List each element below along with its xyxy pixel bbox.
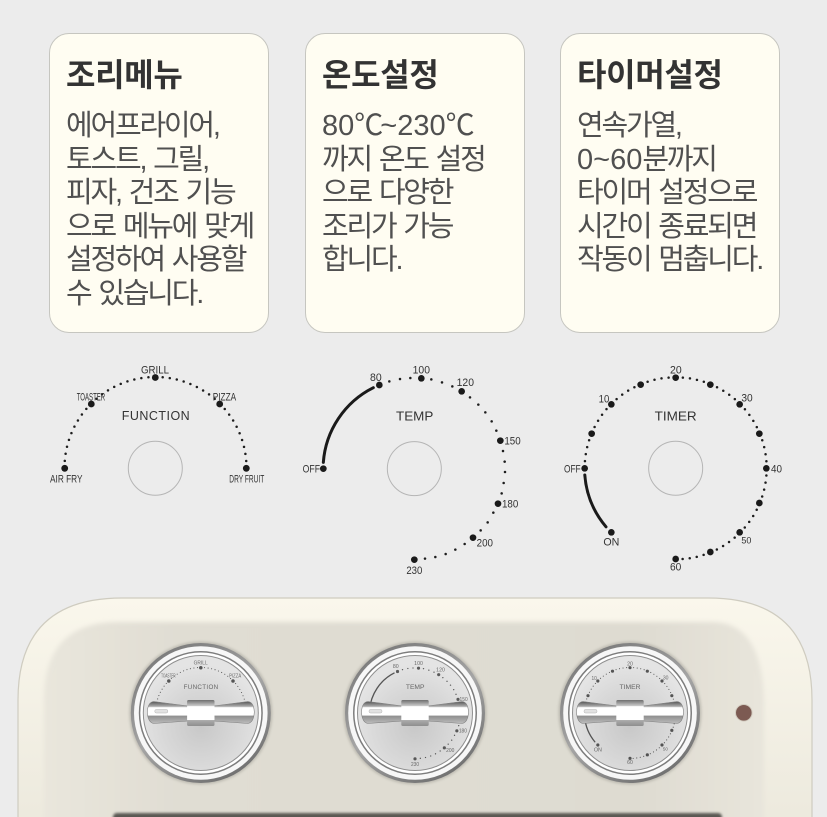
heading: timer setting: 타이머설정 [577,57,723,93]
dial labels: timer: OFF [564,463,581,475]
dial labels: timer [564,365,782,574]
knob dial print: temp: 100 [414,661,423,667]
active arc: timer [585,475,606,527]
dial centre circle: temp [387,442,441,496]
dial labels: timer: 40 [771,463,782,475]
knob dial print: function: GRILL [194,660,208,666]
dial dots: temp [388,377,506,560]
text block: temperature description [322,110,485,276]
dial labels: temp: 120 [457,377,474,389]
dial centre circle: function [128,441,182,495]
dial dots: timer [585,377,767,559]
active arc: temp [323,388,373,462]
knob handle [362,700,468,726]
knob dial print: timer: 50 [663,747,668,752]
text block: timer description: 작동이 멈춥니다. [577,244,762,276]
dial labels: temp: 100 [413,365,430,377]
knob dial print: timer: ON [594,748,602,754]
knob dial print: timer: 10 [591,676,597,682]
knob handle [576,700,684,726]
text block: cooking menu description: 설정하여 사용할 [66,244,245,276]
text block: temperature description: 합니다. [322,244,401,276]
text block: timer description: 0~60분까지 [577,144,716,176]
dial centre circle: timer [649,441,703,495]
text block: temperature description: 조리가 가능 [322,211,452,243]
oven control panel [44,622,764,817]
knob dial print: function: FUNCTION [184,684,218,691]
knob dial print: timer: 20 [627,662,633,668]
dial labels: temp: 200 [477,537,493,549]
dial stops: function [61,374,250,472]
knob dial print: temp: TEMP [406,684,425,691]
dial labels: timer: 20 [670,365,682,377]
dial labels: temp: 230 [406,565,422,577]
knob dial print: timer: 60 [627,760,633,766]
text block: timer description: 시간이 종료되면 [577,211,756,243]
oven window top edge [113,813,722,817]
knob: function [129,642,272,784]
oven body [18,598,812,817]
heading: cooking menu: 조리메뉴 [66,57,183,93]
dial labels: temp [303,365,521,577]
dial diagram: function [50,364,264,495]
dial labels: temp: OFF [303,464,320,476]
dial labels: timer: TIMER [655,408,697,423]
text block: timer description: 연속가열, [577,110,681,142]
text block: cooking menu description: 토스트, 그릴, [66,144,208,176]
knob dial print: temp: 200 [446,748,454,754]
dial labels: function: TOASTER [77,392,105,404]
dial labels: timer: 60 [670,562,681,574]
dial labels: function: PIZZA [213,392,237,404]
text block: temperature description: 으로 다양한 [322,177,452,209]
panel: timer setting [560,33,780,333]
dial diagram: temp [303,365,521,577]
knob: timer [558,642,702,784]
text block: temperature description: 까지 온도 설정 [322,144,485,176]
dial labels: timer: 50 [741,535,751,545]
dial labels: function: FUNCTION [122,409,190,423]
dial stops: temp [320,375,504,563]
text block: cooking menu description: 에어프라이어, [66,110,219,142]
text block: timer description [577,110,762,276]
dial labels: temp: TEMP [396,408,433,423]
dial labels: temp: 80 [370,372,382,384]
knob dial print: temp [370,661,468,768]
dial labels: function: GRILL [141,364,169,376]
knob dial print: temp: 180 [459,729,467,735]
knob dial print: temp: 150 [460,697,468,703]
knob dial print: timer: TIMER [619,684,641,691]
heading: temperature setting: 온도설정 [322,57,439,93]
dial labels: timer: 30 [741,392,753,404]
knob dial print: temp: 230 [411,762,419,768]
dial labels: timer: ON [603,536,619,548]
text block: cooking menu description [66,110,253,310]
dial labels: function [50,364,264,486]
panel: temperature setting [305,33,525,333]
text block: cooking menu description: 피자, 건조 기능 [66,177,234,209]
dial diagram: timer [564,365,782,574]
oven shell [18,598,812,817]
knob dial print: temp: 80 [393,664,399,670]
text block: cooking menu description: 수 있습니다. [66,278,202,310]
knob dial print: timer [584,662,676,766]
knob dial print: temp: 120 [436,667,445,673]
dial labels: timer: 10 [599,393,609,405]
text block: temperature description: 80℃~230℃ [322,110,472,142]
dial labels: function: AIR FRY [50,474,83,486]
dial dots: function [64,377,246,468]
knob dial print: function: PIZZA [229,674,241,680]
panel: cooking menu [49,33,269,333]
indicator light [736,704,752,721]
knob: temp [344,642,486,784]
dial labels: temp: 180 [502,498,518,510]
text block: timer description: 타이머 설정으로 [577,177,756,209]
knob dial print: timer: 30 [663,676,669,682]
knob dial print: function [155,660,246,713]
dial labels: function: DRY FRUIT [229,474,264,486]
dial stops: timer [581,374,770,562]
text block: cooking menu description: 으로 메뉴에 맞게 [66,211,253,243]
dial labels: temp: 150 [504,435,521,447]
knob handle [147,700,254,726]
knob dial print: function: TOASTER [161,674,176,680]
